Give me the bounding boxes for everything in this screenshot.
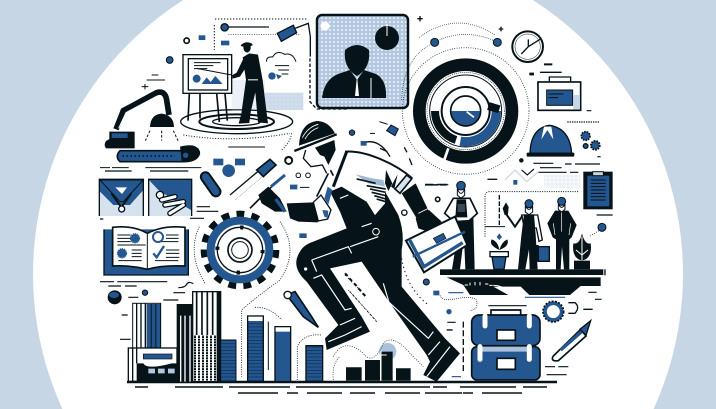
- platform: [440, 269, 605, 295]
- connector with node: [214, 19, 308, 50]
- main worker marks: [284, 122, 463, 381]
- building row: [128, 292, 323, 382]
- orbit dots: [402, 16, 503, 100]
- orb and dashes: [100, 171, 218, 339]
- potted plant right: [573, 233, 591, 269]
- large gear: [205, 215, 275, 285]
- main worker upper body: [250, 121, 442, 232]
- worker three: [547, 197, 577, 269]
- panel outline: [485, 192, 578, 237]
- toolbag: [472, 310, 540, 380]
- map card right: [149, 179, 192, 216]
- hard hat: [527, 122, 599, 157]
- small markers: [142, 35, 229, 89]
- scattered marks: [285, 122, 463, 372]
- ring marker: [285, 157, 292, 164]
- scattered notes: [430, 179, 613, 377]
- top left dashes: [100, 147, 265, 168]
- halftone block: [232, 80, 303, 110]
- target and right column: [402, 16, 601, 188]
- shirt: [317, 152, 412, 215]
- gears: [581, 132, 600, 150]
- presentation scene: [100, 19, 347, 200]
- hatch block: [544, 175, 581, 188]
- portrait frame: [317, 15, 408, 108]
- clock: [512, 31, 543, 62]
- paperclip: [199, 170, 222, 198]
- left column: [99, 171, 323, 382]
- concentric target: [402, 48, 529, 174]
- pencil: [552, 321, 591, 361]
- dotted curves: [194, 222, 322, 380]
- dashed ground lines: [127, 382, 557, 393]
- far arm and glove: [402, 183, 442, 232]
- presenter: [197, 42, 268, 124]
- worker two: [503, 200, 549, 269]
- ripple platform: [181, 110, 293, 150]
- easel board: [183, 55, 232, 122]
- blue connector icon: [213, 159, 245, 177]
- writing arm: [250, 175, 331, 222]
- background workers: [445, 181, 577, 269]
- head and hard hat: [294, 121, 337, 174]
- excavator: [105, 92, 199, 162]
- cloud note: [267, 53, 296, 80]
- open book: [104, 227, 188, 275]
- small pen: [284, 291, 318, 327]
- list dashes: [425, 111, 601, 184]
- map card left: [99, 179, 143, 216]
- briefcase: [529, 63, 581, 110]
- potted plant centre: [490, 233, 508, 269]
- main worker trousers: [296, 187, 460, 382]
- toolbox: [406, 217, 467, 272]
- city silhouettes: [333, 340, 423, 381]
- camera-like tag: [277, 23, 347, 109]
- right lower scene: [430, 172, 613, 380]
- worker one: [445, 181, 477, 269]
- clipboard: [583, 172, 613, 209]
- small gear: [543, 301, 593, 322]
- pen: [230, 159, 276, 200]
